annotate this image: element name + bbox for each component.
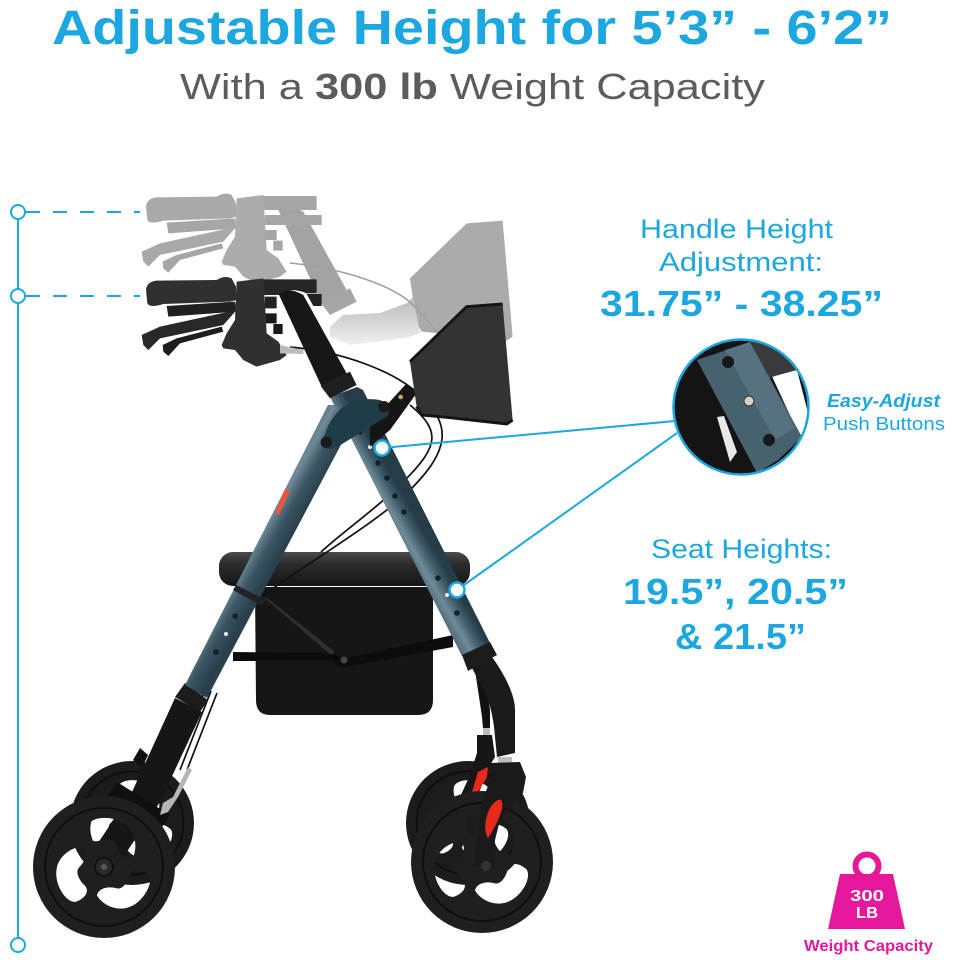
hinge plate <box>322 399 389 449</box>
under-seat storage basket <box>255 587 433 715</box>
crossbar end knob <box>265 294 322 308</box>
brake cables <box>172 347 442 772</box>
handle height label: Handle Height <box>640 214 834 244</box>
callout lines to magnifier <box>382 421 677 590</box>
crossbar <box>263 279 317 295</box>
height scale line with markers <box>11 205 140 952</box>
red frame sticker <box>275 489 290 515</box>
rear right wheel <box>406 761 530 885</box>
push buttons label: Easy-Adjust <box>827 391 941 411</box>
front fork with red reflector <box>474 762 526 871</box>
seat heights label: 19.5”, 20.5” <box>623 571 848 612</box>
arm linking frame to bag <box>370 383 417 447</box>
post collar <box>321 372 357 398</box>
bracket knobs <box>265 313 283 334</box>
callout dot: lower push button <box>450 582 464 598</box>
subtitle: With a 300 lb Weight Capacity <box>180 66 765 107</box>
right leg collar <box>462 642 497 671</box>
folding cross brace <box>233 596 453 667</box>
brass bolt <box>398 395 403 399</box>
push buttons label <box>823 391 945 434</box>
callout dot: upper push button <box>374 440 390 456</box>
front right wheel <box>411 791 553 933</box>
rear cable fittings and bracket <box>108 767 192 827</box>
front left wheel <box>33 796 175 938</box>
handle height label: 31.75” - 38.25” <box>600 283 883 324</box>
seat heights label: Seat Heights: <box>651 534 832 564</box>
icon: weight capacity: Weight Capacity <box>804 938 933 955</box>
hand grip <box>146 277 237 306</box>
rear left wheel <box>70 761 194 885</box>
cable fitting <box>280 345 303 354</box>
icon: weight capacity <box>804 854 933 955</box>
left leg collar <box>175 683 208 712</box>
ghost brake cable <box>290 263 445 345</box>
seat <box>219 552 470 586</box>
brake lever upper <box>142 310 237 350</box>
height post <box>278 290 347 387</box>
icon: weight capacity: LB <box>856 905 878 922</box>
lower grip block <box>167 302 237 317</box>
chrome fork stems <box>483 728 512 763</box>
padded backrest bag <box>410 304 513 424</box>
brake lever lower <box>163 327 223 356</box>
ghost bracket fading to white <box>330 297 420 345</box>
title: Adjustable Height for 5’3” - 6’2” <box>52 2 892 55</box>
handle height label: Adjustment: <box>659 247 823 277</box>
upper frame handle section <box>142 277 513 449</box>
backrest bag dark piping <box>410 304 513 424</box>
small rear brake bracket <box>133 748 148 768</box>
hinge bolts <box>321 401 390 448</box>
right leg narrow back tube <box>475 670 490 728</box>
frame adjustment holes <box>213 429 460 655</box>
seat heights label <box>623 534 848 657</box>
left teal frame tube <box>185 405 362 698</box>
black lower left leg <box>92 698 202 862</box>
push buttons label: Push Buttons <box>823 414 945 434</box>
handle height label <box>600 214 883 324</box>
right teal frame tube <box>330 387 490 656</box>
rear front-fork with red reflector <box>460 735 495 797</box>
curved black front right leg <box>472 657 515 757</box>
seat heights label: & 21.5” <box>675 616 806 657</box>
seat strap on left tube <box>233 585 266 606</box>
ghost raised handle and bag <box>142 194 513 341</box>
rollator walker photo illustration <box>33 194 553 938</box>
icon: weight capacity: 300 <box>850 888 884 905</box>
brake bracket <box>222 278 287 367</box>
magnifier circle: push button close-up <box>670 335 815 480</box>
